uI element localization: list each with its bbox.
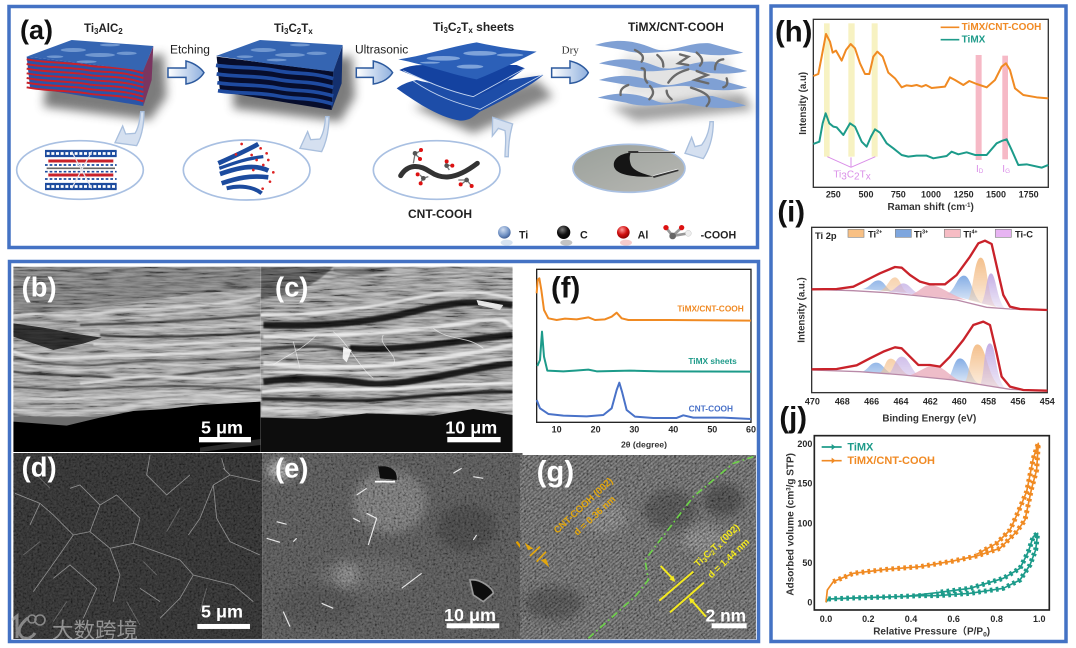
axis labels: 456 [1010, 397, 1025, 407]
heading: Ti3AlC2: AlC [98, 23, 118, 35]
annotation: Ti3C2Tx peaks: 2 [854, 171, 860, 182]
annotation: Ti3C2Tx d-spacing: C [701, 548, 714, 561]
annotation: Ti3C2Tx peaks: T [860, 169, 866, 180]
XPS chart (i) [777, 196, 1055, 434]
axis ticks: 50 [707, 425, 717, 435]
legend: atom types: Ti [519, 229, 528, 241]
BET isotherm chart (j): 0.0 [820, 614, 832, 624]
fit peaks: lower spectrum [862, 343, 1005, 389]
legend: Ti [963, 229, 971, 239]
label (f): (f) [551, 272, 580, 305]
XPS chart (i): Binding Energy (eV) [882, 413, 976, 424]
annotation: Ti3C2Tx peaks: x [866, 171, 871, 182]
annotation: Ti3C2Tx d-spacing: x [717, 543, 724, 550]
legend: 4+ [971, 230, 978, 236]
heading: Ti3C2Tx sheets: C [448, 20, 457, 34]
panel: (b)-(g) microscopy and XRD [10, 262, 758, 643]
label (i): (i) [777, 196, 805, 229]
SEM image (e) [263, 453, 523, 639]
legend: 3+ [922, 230, 928, 236]
axis labels: 466 [864, 397, 879, 407]
axis ticks: 30 [629, 425, 639, 435]
arrow: etching step: Etching [170, 42, 210, 56]
heading: Ti3C2Tx: x [308, 27, 313, 36]
annotation: Ti3C2Tx d-spacing: d = 1.44 nm [706, 537, 752, 581]
legend: TiMX/CNT-COOH [962, 22, 1041, 33]
curve: CNT-COOH [537, 383, 751, 419]
scale bar: 5 µm: 5 μm [201, 418, 243, 438]
BET isotherm chart (j): ) [987, 626, 990, 637]
legend: 2+ [876, 230, 882, 236]
heading: Ti3AlC2: 3 [94, 27, 99, 36]
annotation: ID and IG: D [979, 168, 984, 175]
BET isotherm chart (j): 0.4 [905, 614, 917, 624]
heading: Ti3AlC2: 2 [118, 27, 123, 36]
BET isotherm chart (j): 1.0 [1033, 614, 1046, 624]
annotation: Ti3C2Tx peaks: C [847, 169, 854, 180]
series labels [677, 303, 744, 414]
envelope: lower spectrum [812, 322, 1047, 391]
axis labels: 470 [805, 397, 820, 407]
baselines [812, 289, 1047, 391]
BET isotherm chart (j): 3 [786, 487, 792, 491]
axis labels: 100 [797, 518, 812, 528]
arrow: etching step [168, 42, 210, 84]
legend: Ti 2p [815, 231, 837, 241]
axis labels: 500 [858, 190, 873, 200]
annotation: ID and IG: I [1002, 164, 1005, 175]
illustration: etched Ti3C2Tx block [216, 40, 355, 122]
annotation: ID and IG [976, 164, 1010, 175]
arrow: dry step [552, 44, 588, 83]
series labels: CNT-COOH [689, 404, 733, 414]
axis labels: 458 [981, 397, 996, 407]
axis labels: 460 [952, 397, 967, 407]
annotation: CNT-COOH d-spacing [525, 476, 618, 567]
heading: TiMX/CNT-COOH: TiMX/CNT-COOH [628, 20, 724, 34]
BET isotherm chart (j): 0.6 [947, 614, 960, 624]
label (b): (b) [22, 272, 57, 303]
arrow: to Ti3AlC2 structure [115, 112, 144, 146]
heading: Ti3AlC2: Ti [84, 23, 94, 35]
axis labels: 50 [802, 558, 812, 568]
heading: Ti3C2Tx sheets: 3 [443, 26, 448, 35]
annotation: Ti3C2Tx d-spacing: (002) [716, 522, 742, 547]
annotation: Ti3C2Tx d-spacing [659, 522, 752, 617]
axis labels: 150 [797, 479, 812, 489]
axis labels: 750 [891, 190, 906, 200]
D and G bands [976, 55, 1008, 160]
legend [941, 22, 1041, 46]
oval: film photograph [573, 144, 685, 192]
watermark logo: 大数跨境 [52, 619, 138, 643]
legend: atom types [498, 225, 736, 246]
heading: Ti3C2Tx sheets: x [468, 26, 473, 35]
axis labels: 1750 [1019, 190, 1039, 200]
legend: TiMX/CNT-COOH [847, 455, 935, 467]
envelope: upper spectrum [812, 241, 1047, 310]
axis ticks: 40 [668, 425, 678, 435]
axis labels: 200 [797, 439, 812, 449]
annotation: Ti3C2Tx peaks: 3 [841, 171, 847, 182]
axis labels: 464 [893, 397, 908, 407]
curve: TiMX/CNT-COOH Raman [813, 34, 1048, 98]
oval: CNT-COOH molecule [373, 141, 500, 199]
arrow: dry step: Dry [562, 44, 579, 56]
SEM image (d) [13, 452, 263, 639]
panel label (a): (a) [20, 15, 53, 45]
annotation: Ti3C2Tx d-spacing: T [709, 542, 721, 554]
scale bar: 5 µm: 5 μm [201, 602, 243, 622]
label (g): (g) [537, 456, 574, 489]
heading: Ti3C2Tx sheets: sheets [473, 20, 515, 34]
legend: TiMX [962, 35, 986, 46]
panel: (h)-(j) spectra [771, 6, 1066, 642]
axis ticks: 10 [552, 425, 562, 435]
BET isotherm chart (j): Relative Pressure（P/P [873, 626, 983, 637]
axis labels: 454 [1040, 397, 1055, 407]
arrow: to film photograph [685, 122, 713, 159]
arrow: CNT-COOH into sheets [492, 117, 513, 157]
heading: Ti3C2Tx sheets: T [461, 20, 469, 34]
scale bar: 10 µm [446, 422, 501, 442]
XRD chart (f) [537, 269, 756, 450]
annotation: ID and IG: I [976, 164, 979, 175]
panel: (a) synthesis schematic [9, 6, 758, 248]
watermark logo [12, 615, 138, 643]
Raman chart (h): Raman shift (cm [887, 202, 965, 213]
axis title: 2θ (degree) [621, 440, 667, 450]
axis labels: 250 [826, 190, 841, 200]
axis labels: 0 [807, 598, 812, 608]
heading: Ti3C2Tx sheets: 2 [457, 26, 462, 35]
series labels: TiMX sheets [688, 356, 737, 366]
legend: atom types: -COOH [701, 229, 736, 241]
Raman chart (h): -1 [965, 203, 971, 209]
curves: TiMX isotherm [826, 533, 1038, 602]
label (h): (h) [775, 15, 812, 48]
green boundary [588, 457, 753, 638]
annotation: Ti3C2Tx d-spacing: 2 [710, 549, 717, 557]
legend: Ti [868, 229, 876, 239]
SEM image (c) [261, 267, 513, 452]
axis ticks: 20 [591, 425, 601, 435]
Raman chart (h): Intensity (a.u) [798, 72, 809, 135]
annotation: Ti3C2Tx d-spacing: Ti [693, 556, 706, 570]
annotation: CNT-COOH d-spacing: d = 0.36 nm [572, 494, 618, 538]
axis labels: 462 [923, 397, 938, 407]
fit peaks: upper spectrum [862, 258, 1005, 308]
curve: TiMX/CNT-COOH [537, 278, 751, 321]
label (d): (d) [22, 452, 57, 483]
XPS chart (i): Intensity (a.u.) [797, 277, 808, 343]
scale bar: 10 µm [445, 609, 500, 628]
SEM image (b) [13, 267, 261, 452]
heading: CNT-COOH: CNT-COOH [408, 207, 472, 221]
scale bar: 5 µm [197, 606, 250, 629]
scale bar: 10 µm: 10 μm [444, 605, 496, 625]
axis labels: 1250 [954, 190, 974, 200]
BET isotherm chart (j): /g STP) [785, 453, 796, 487]
axis labels: 1500 [986, 190, 1006, 200]
legend: Ti-C [1015, 229, 1033, 239]
label (c): (c) [275, 272, 308, 303]
curve: TiMX sheets [537, 332, 751, 372]
scale bar: 5 µm [198, 422, 251, 442]
label (j): (j) [779, 401, 807, 434]
illustration: TiMX/CNT-COOH layered network [595, 41, 753, 122]
annotation: Ti3C2Tx d-spacing: 3 [702, 556, 710, 564]
curve: TiMX Raman [813, 113, 1048, 168]
scale bar: 2 nm: 2 nm [706, 606, 746, 626]
axis labels [805, 397, 1055, 407]
heading: Ti3C2Tx: T [301, 23, 308, 35]
scale bar: 10 µm: 10 μm [445, 418, 497, 438]
legend: Ti [914, 229, 922, 239]
axis labels [826, 190, 1039, 200]
legend: atom types: C [580, 229, 588, 241]
BET isotherm chart (j): Adsorbed volume (cm [785, 491, 796, 596]
annotation: CNT-COOH d-spacing: CNT-COOH (002) [552, 476, 615, 536]
arrow: ultrasonic step [355, 42, 408, 84]
axis ticks: 60 [746, 425, 756, 435]
legend [822, 441, 935, 467]
heading: Ti3C2Tx: 2 [297, 27, 302, 36]
annotation: ID and IG: G [1005, 168, 1010, 175]
series labels: TiMX/CNT-COOH [677, 303, 744, 313]
highlight bands [824, 23, 878, 157]
heading: Ti3C2Tx: C [288, 23, 297, 35]
oval: etched layers with released Al [183, 140, 310, 200]
axis labels: 468 [835, 397, 850, 407]
BET isotherm chart (j): 0 [983, 631, 987, 638]
BET isotherm chart (j): 0.2 [862, 614, 875, 624]
legend: atom types: Al [638, 229, 648, 241]
TEM image (g) [520, 455, 756, 639]
heading: Ti3C2Tx: 3 [284, 27, 289, 36]
legend: TiMX [847, 441, 874, 453]
legend [815, 229, 1033, 241]
axis ticks [552, 425, 756, 435]
annotation: Ti3C2Tx peaks [827, 157, 875, 182]
BET isotherm chart (j): 0.8 [990, 614, 1003, 624]
heading: Ti3C2Tx: Ti [274, 23, 284, 35]
heading: Ti3C2Tx sheets: Ti [433, 20, 443, 34]
oval: Ti3AlC2 crystal structure [17, 141, 143, 199]
curves: TiMX/CNT-COOH isotherm [826, 443, 1038, 602]
Raman chart (h) [775, 15, 1048, 213]
BET isotherm chart (j) [785, 436, 1049, 638]
axis labels: 1000 [921, 190, 941, 200]
axis labels [797, 439, 812, 608]
arrow: ultrasonic step: Ultrasonic [355, 42, 408, 56]
illustration: exfoliated sheets [397, 42, 553, 133]
annotation: Ti3C2Tx peaks: Ti [833, 169, 841, 180]
label (e): (e) [275, 453, 308, 484]
illustration: Ti3AlC2 layered block [27, 40, 167, 120]
arrow: to Ti3C2Tx structure [300, 117, 329, 152]
Raman chart (h): ) [970, 202, 974, 213]
scale bar: 2 nm [706, 610, 747, 628]
